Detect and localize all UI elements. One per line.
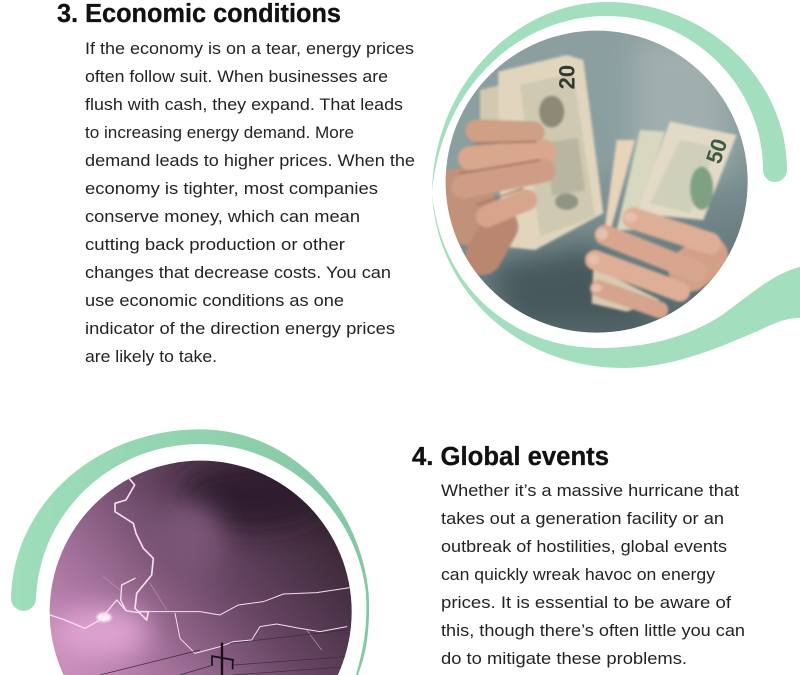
text block: global events: prices. It is essential to be aware of — [441, 593, 731, 612]
text block: economic conditions: demand leads to higher prices. When the — [85, 151, 415, 170]
right hand — [595, 218, 710, 310]
text block: global events: can quickly wreak havoc on energy — [441, 565, 716, 584]
green swoosh around money photo — [432, 2, 800, 368]
text block: economic conditions: indicator of the direction energy prices — [85, 319, 395, 338]
power pole — [100, 630, 347, 675]
text block: global events: takes out a generation facility or an — [441, 509, 724, 528]
text block: economic conditions: flush with cash, they expand. That leads — [85, 95, 403, 114]
text block: economic conditions: economy is tighter, most companies — [85, 179, 378, 198]
photo: hands holding dollar bills: 50 — [701, 136, 732, 167]
text block: economic conditions — [85, 39, 415, 366]
text block: global events — [441, 481, 745, 668]
heading: 3. Economic conditions: 3. Economic conditions — [57, 0, 341, 28]
text block: economic conditions: often follow suit. When businesses are — [85, 67, 388, 86]
text block: economic conditions: conserve money, which can mean — [85, 207, 360, 226]
text block: global events: outbreak of hostilities, global events — [441, 537, 727, 556]
text block: economic conditions: are likely to take. — [85, 347, 217, 366]
text block: economic conditions: to increasing energy demand. More — [85, 123, 354, 142]
text block: economic conditions: use economic conditions as one — [85, 291, 344, 310]
text block: economic conditions: changes that decrease costs. You can — [85, 263, 391, 282]
photo: lightning storm over power lines — [47, 457, 357, 675]
text block: economic conditions: If the economy is on a tear, energy prices — [85, 39, 414, 58]
text block: global events: do to mitigate these problems. — [441, 649, 687, 668]
lightning bolts — [50, 479, 350, 653]
heading: 4. Global events: 4. Global events — [412, 443, 609, 471]
text block: global events: Whether it’s a massive hurricane that — [441, 481, 739, 500]
text block: global events: this, though there’s often little you can — [441, 621, 745, 640]
photo: hands holding dollar bills: 20 — [555, 65, 580, 89]
text block: economic conditions: cutting back production or other — [85, 235, 345, 254]
photo: hands holding dollar bills — [443, 28, 750, 335]
left hand — [460, 131, 545, 257]
green swoosh around lightning photo — [11, 429, 369, 675]
